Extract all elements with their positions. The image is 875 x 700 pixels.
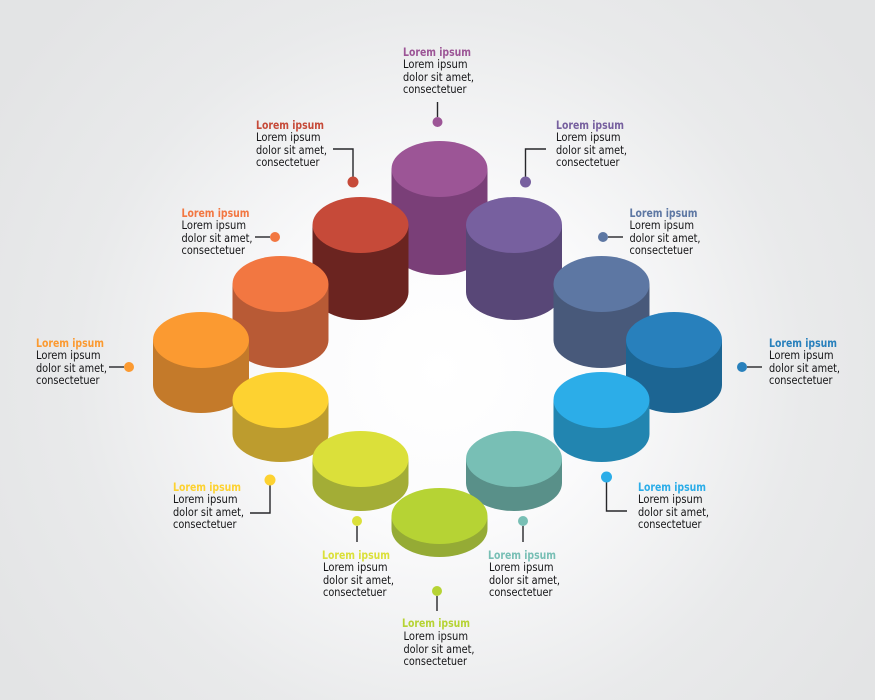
label: cyan <box>638 480 709 531</box>
label: teal: Lorem ipsum <box>488 548 556 562</box>
label: violet <box>556 118 627 169</box>
connector: green <box>432 586 442 611</box>
cylinder: lime yellow <box>312 431 408 511</box>
cylinder: yellow <box>232 372 328 462</box>
label: violet: Lorem ipsum <box>556 130 620 144</box>
label: lime yellow <box>322 548 394 599</box>
connector: slate <box>598 232 623 242</box>
label: lime yellow: Lorem ipsum <box>322 548 390 562</box>
label: teal: Lorem ipsum <box>489 560 554 574</box>
label: blue: consectetuer <box>769 373 833 387</box>
connector: yellow <box>250 474 276 513</box>
label: amber <box>36 336 107 387</box>
label: orange: Lorem ipsum <box>182 206 250 220</box>
connector: violet <box>520 149 546 188</box>
label: purple <box>403 45 474 96</box>
label: cyan: Lorem ipsum <box>638 480 706 494</box>
label: green: dolor sit amet, <box>404 642 474 656</box>
cylinder: red <box>312 197 408 320</box>
label: cyan: dolor sit amet, <box>638 505 709 519</box>
label: orange: dolor sit amet, <box>182 231 252 245</box>
label: amber: Lorem ipsum <box>36 336 104 350</box>
label: slate <box>630 206 700 257</box>
label: purple: Lorem ipsum <box>403 45 471 59</box>
cylinder: green <box>392 488 488 557</box>
cylinder: orange <box>232 256 328 368</box>
connector: lime yellow <box>352 516 362 542</box>
label: red: Lorem ipsum <box>256 130 320 144</box>
label: slate: dolor sit amet, <box>630 231 700 245</box>
label: yellow: Lorem ipsum <box>173 492 238 506</box>
label: amber: consectetuer <box>36 373 100 387</box>
label: lime yellow: dolor sit amet, <box>323 573 394 587</box>
label: slate: Lorem ipsum <box>630 218 694 232</box>
label: red: dolor sit amet, <box>256 143 327 157</box>
label: green: Lorem ipsum <box>402 616 470 630</box>
label: green <box>402 616 474 668</box>
label: violet: dolor sit amet, <box>556 143 627 157</box>
cylinder: cyan <box>554 372 650 462</box>
label: lime yellow: consectetuer <box>323 585 387 599</box>
label: green: consectetuer <box>404 654 467 668</box>
label: teal: consectetuer <box>489 585 553 599</box>
cylinder: purple <box>392 141 488 275</box>
connector: blue <box>737 362 762 372</box>
label: teal <box>488 548 560 599</box>
label: blue: dolor sit amet, <box>769 361 840 375</box>
label: blue: Lorem ipsum <box>769 336 837 350</box>
label: red <box>256 118 327 169</box>
cylinder: amber <box>153 312 249 413</box>
label: slate: consectetuer <box>630 243 693 257</box>
connector: amber <box>109 362 134 372</box>
connector: purple <box>432 102 442 127</box>
label: yellow: Lorem ipsum <box>173 480 241 494</box>
cylinder: teal <box>466 431 562 511</box>
label: teal: dolor sit amet, <box>489 573 560 587</box>
label: red: consectetuer <box>256 155 320 169</box>
label: yellow: consectetuer <box>173 517 237 531</box>
label: green: Lorem ipsum <box>404 629 468 643</box>
label: violet: Lorem ipsum <box>556 118 624 132</box>
label: blue: Lorem ipsum <box>769 348 834 362</box>
label: slate: Lorem ipsum <box>630 206 698 220</box>
label: purple: Lorem ipsum <box>403 57 468 71</box>
label: amber: Lorem ipsum <box>36 348 100 362</box>
label: red: Lorem ipsum <box>256 118 324 132</box>
label: orange: Lorem ipsum <box>182 218 246 232</box>
label: violet: consectetuer <box>556 155 620 169</box>
label: lime yellow: Lorem ipsum <box>323 560 388 574</box>
label: purple: consectetuer <box>403 82 467 96</box>
label: yellow <box>173 480 244 531</box>
cylinder: blue <box>626 312 722 413</box>
label: purple: dolor sit amet, <box>403 70 474 84</box>
label: cyan: consectetuer <box>638 517 702 531</box>
label: yellow: dolor sit amet, <box>173 505 244 519</box>
connector: cyan <box>601 472 627 511</box>
label: blue <box>769 336 840 387</box>
cylinder: violet <box>466 197 562 320</box>
label: amber: dolor sit amet, <box>36 361 107 375</box>
label: orange <box>182 206 252 257</box>
connector: orange <box>255 232 280 242</box>
connector: teal <box>518 516 528 542</box>
cylinder: slate <box>554 256 650 368</box>
label: cyan: Lorem ipsum <box>638 492 702 506</box>
connector: red <box>333 149 358 188</box>
label: orange: consectetuer <box>182 243 245 257</box>
